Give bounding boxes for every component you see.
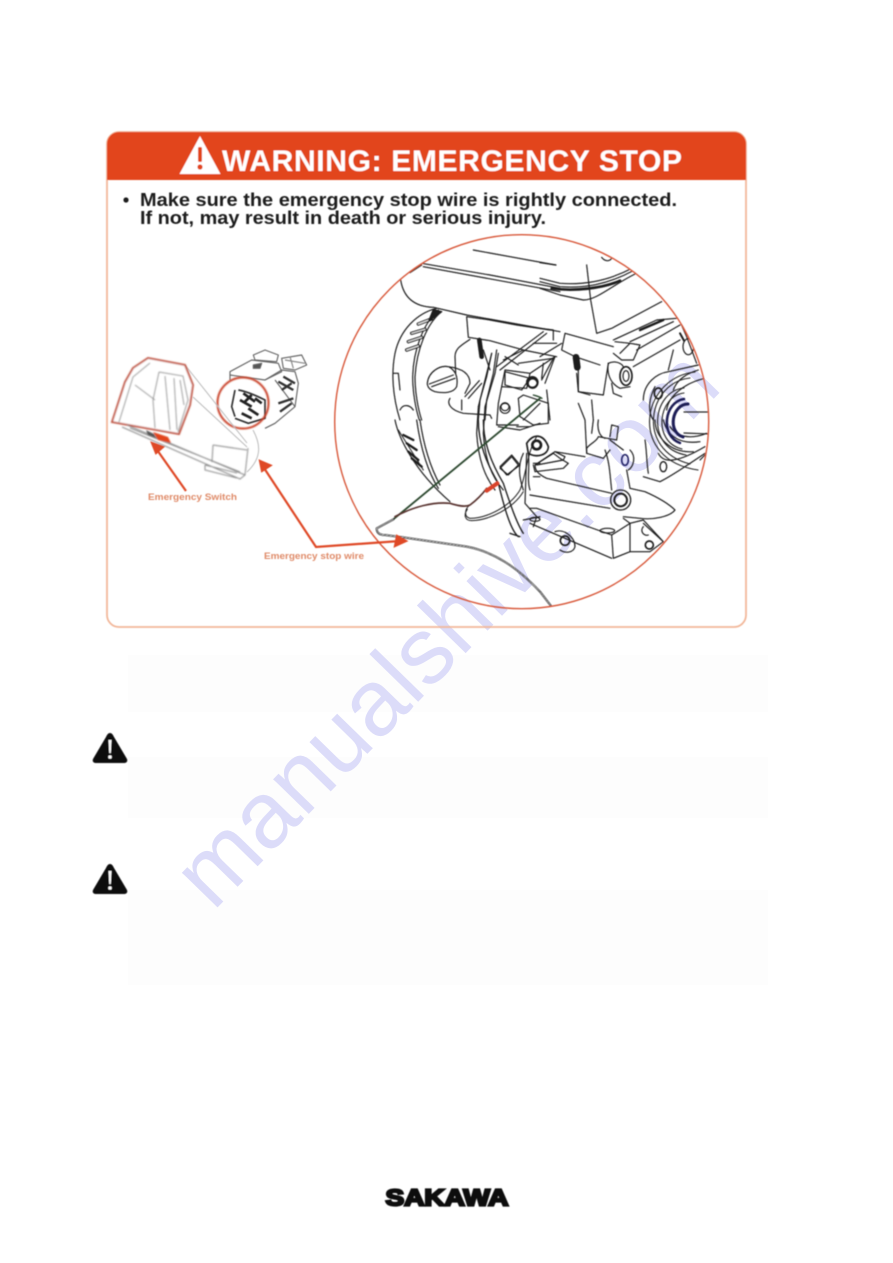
stop wire bbox=[377, 395, 557, 613]
icon: warning triangle white bbox=[180, 136, 220, 174]
engine lower left: flywheel base, stop wire bbox=[395, 420, 540, 537]
panel: emergency stop warning bbox=[93, 132, 746, 1210]
arrow: emergency stop wire bbox=[260, 461, 406, 547]
bullet text bbox=[123, 190, 677, 228]
watermark: manualshive.com bbox=[152, 329, 738, 926]
logo: SAKAWA: SAKAWA bbox=[386, 1184, 508, 1210]
small engine illustration bbox=[230, 350, 307, 428]
engine upper right: rim, shroud, fins bbox=[540, 257, 705, 420]
label: emergency switch: Emergency Switch bbox=[148, 492, 237, 502]
bullet text: Make sure the emergency stop wire is rightly connected. bbox=[140, 190, 677, 210]
small engine red circle bbox=[218, 378, 268, 428]
engine middle: carburettor and wire bolts bbox=[477, 353, 590, 490]
arrow: emergency switch bbox=[152, 443, 186, 491]
icon: warning triangle 1 bbox=[93, 733, 127, 763]
handle bar bbox=[122, 425, 248, 479]
faint text block 3 bbox=[128, 890, 768, 985]
output shaft and bearing bbox=[650, 372, 710, 470]
label: emergency stop wire: Emergency stop wire bbox=[264, 551, 364, 561]
heading: WARNING: EMERGENCY STOP bbox=[222, 145, 682, 178]
emergency switch highlight bbox=[153, 432, 171, 443]
header banner bbox=[107, 132, 746, 180]
bullet text: If not, may result in death or serious injury. bbox=[140, 208, 546, 228]
zoom guide lines bbox=[185, 365, 259, 472]
engine upper left: tank, flywheel, knob bbox=[393, 250, 560, 420]
panel border bbox=[107, 132, 746, 627]
faint text block 2 bbox=[128, 757, 768, 818]
recoil housing close-up bbox=[112, 358, 248, 479]
detail circle: engine close-up bbox=[335, 235, 710, 613]
faint text block 1 bbox=[128, 655, 768, 712]
engine lower right: foot, mount, flange bbox=[530, 420, 707, 558]
icon: warning triangle 2 bbox=[93, 864, 127, 894]
